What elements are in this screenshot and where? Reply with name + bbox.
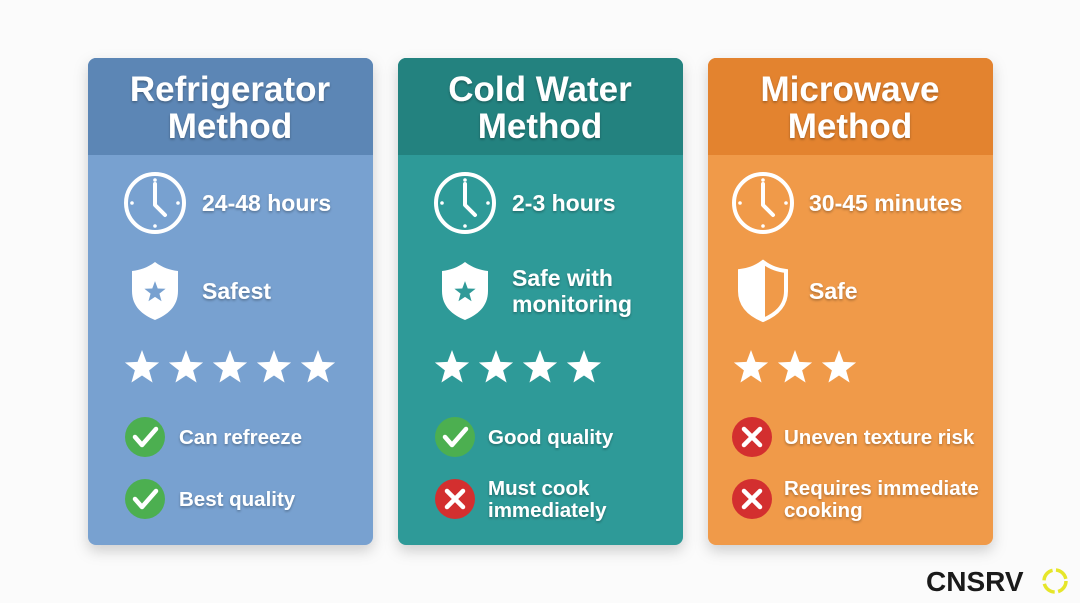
logo: CNSRV bbox=[926, 566, 1066, 597]
con: requires immediate cooking bbox=[732, 477, 979, 522]
con: must cook immediately: Must cook bbox=[488, 477, 590, 500]
pro: good quality: Good quality bbox=[488, 426, 614, 449]
con: must cook immediately: immediately bbox=[488, 499, 607, 522]
icon: clock bbox=[126, 174, 184, 232]
con: must cook immediately bbox=[435, 477, 607, 522]
pro: best quality: Best quality bbox=[179, 488, 296, 511]
text: time: 30-45 minutes bbox=[809, 190, 962, 216]
header: cold water bbox=[398, 58, 683, 155]
header: cold water: Method bbox=[478, 107, 602, 146]
text: safety: monitoring bbox=[512, 291, 632, 317]
header: microwave: Method bbox=[788, 107, 912, 146]
text: time: 2-3 hours bbox=[512, 190, 616, 216]
text: safety: Safe with bbox=[512, 265, 613, 291]
rating: 3 stars bbox=[734, 350, 856, 383]
logo: CNSRV: CNSRV bbox=[926, 566, 1024, 597]
icon: shield bbox=[132, 262, 178, 320]
text: safety: Safe bbox=[809, 278, 858, 304]
text: safety: Safest bbox=[202, 278, 271, 304]
pro: can refreeze: Can refreeze bbox=[179, 426, 302, 449]
header: refrigerator: Method bbox=[168, 107, 292, 146]
panel: cold water method bbox=[398, 58, 683, 545]
icon: half shield bbox=[740, 262, 786, 320]
pro: best quality bbox=[125, 479, 296, 519]
header: refrigerator: Refrigerator bbox=[130, 70, 331, 109]
icon: shield bbox=[442, 262, 488, 320]
con: requires immediate cooking: cooking bbox=[784, 499, 863, 522]
panel: refrigerator method bbox=[88, 58, 373, 545]
text: time: 24-48 hours bbox=[202, 190, 331, 216]
header: refrigerator bbox=[88, 58, 373, 155]
rating: 5 stars bbox=[125, 350, 335, 383]
icon: clock bbox=[734, 174, 792, 232]
con: uneven texture bbox=[732, 417, 975, 457]
con: uneven texture: Uneven texture risk bbox=[784, 426, 975, 449]
pro: good quality bbox=[435, 417, 614, 457]
rating: 4 stars bbox=[435, 350, 601, 383]
header: microwave bbox=[708, 58, 993, 155]
pro: can refreeze bbox=[125, 417, 302, 457]
header: microwave: Microwave bbox=[761, 70, 939, 109]
header: cold water: Cold Water bbox=[448, 70, 632, 109]
con: requires immediate cooking: Requires immediate bbox=[784, 477, 979, 500]
icon: clock bbox=[436, 174, 494, 232]
panel: microwave method bbox=[708, 58, 993, 545]
